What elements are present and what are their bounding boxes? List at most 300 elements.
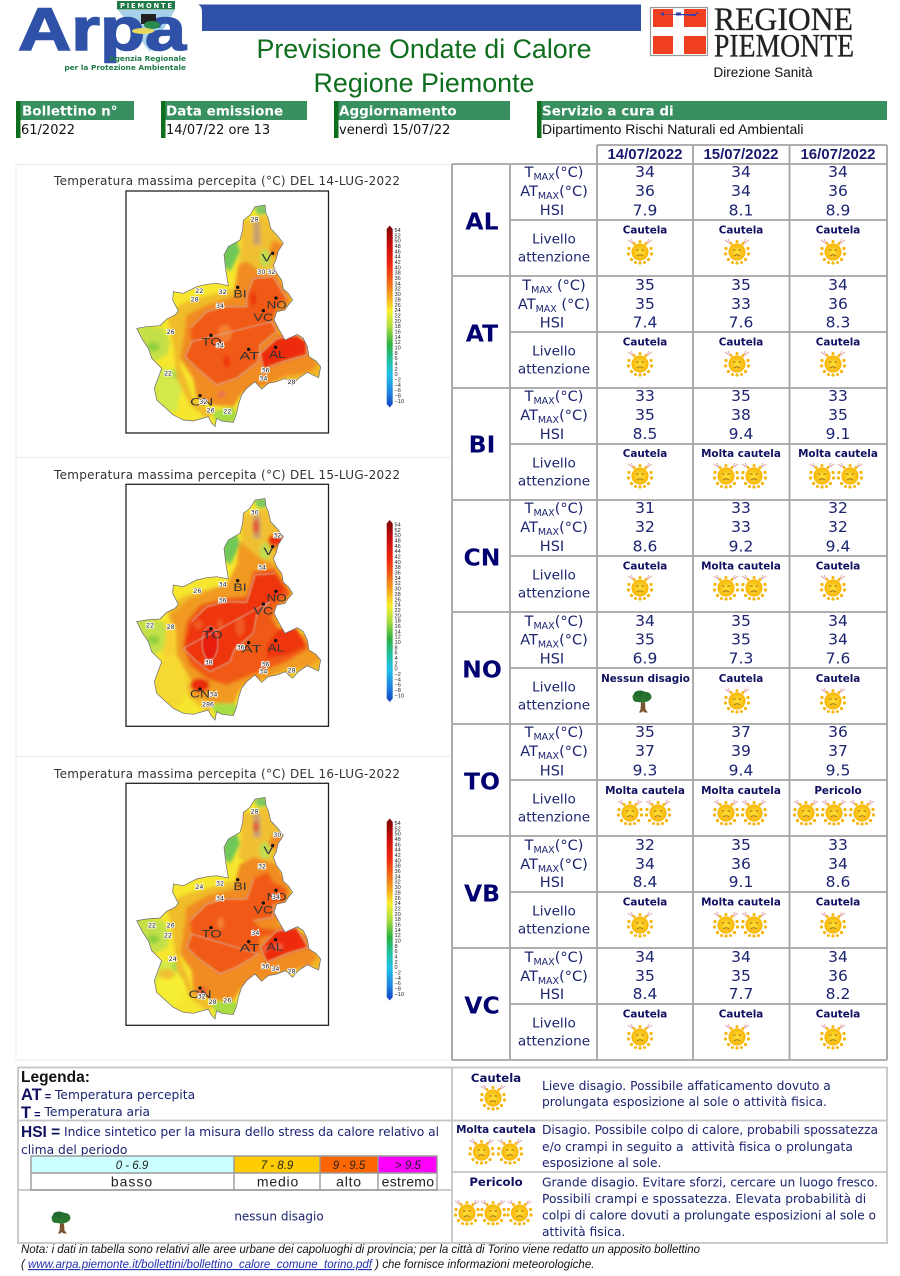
map 14 luglio: 22 <box>164 371 172 378</box>
row CN: MAX <box>538 527 560 538</box>
row CN: Cautela <box>623 560 667 572</box>
row VC: 34 <box>635 948 655 966</box>
row AT: T <box>522 278 531 294</box>
row VB: attenzione <box>518 922 590 938</box>
legend: HSI scale table: 7 - 8.9 <box>261 1160 294 1172</box>
map 15 luglio: 34 <box>259 668 267 675</box>
colour scale: −8 <box>394 394 401 400</box>
map 15 luglio <box>53 468 404 726</box>
row BI: 38 <box>731 406 751 424</box>
logo: Regione Piemonte: PIEMONTE <box>714 28 854 64</box>
row VC: HSI <box>540 987 564 1003</box>
row VC: 34 <box>731 948 751 966</box>
table header dates: 14/07/2022 <box>607 146 683 163</box>
info box: Bollettino: 61/2022 <box>21 123 75 138</box>
map 16 luglio: 22 <box>164 933 172 940</box>
row CN: attenzione <box>518 586 590 602</box>
colour scale: 32 <box>394 880 401 886</box>
row NO: 34 <box>635 612 655 630</box>
info box: Data emissione: 14/07/22 ore 13 <box>166 123 270 138</box>
colour scale: 34 <box>394 874 401 880</box>
colour scale: 2 <box>394 367 398 373</box>
row NO: 7.3 <box>729 650 753 668</box>
row AT: Livello <box>532 344 576 360</box>
map 16 luglio: 28 <box>288 969 296 976</box>
row BI: Cautela <box>623 448 667 460</box>
footnote: Nota: i dati in tabella sono relativi alle aree urbane dei capoluoghi di provincia; per la città di Torino viene redatto un apposito bollettino <box>21 1244 701 1256</box>
row AT: Cautela <box>719 336 763 348</box>
row AL: 36 <box>635 182 655 200</box>
row VC <box>464 948 860 1050</box>
map 16 luglio: 24 <box>169 956 177 963</box>
colour scale: 50 <box>394 533 401 539</box>
map 16 luglio: 34 <box>216 895 224 902</box>
map 16 luglio: 34 <box>272 894 280 901</box>
map 15 luglio: 30 <box>251 510 259 517</box>
legend: HSI definition: Indice sintetico per la misura dello stress da calore relativo al <box>64 1125 439 1139</box>
map 14 luglio: Temperatura massima percepita (°C) DEL 14-LUG-2022 <box>53 174 400 188</box>
row VB: Cautela <box>816 896 860 908</box>
colour scale: 6 <box>394 356 398 362</box>
map 16 luglio: 32 <box>258 863 266 870</box>
row AT: 7.4 <box>633 314 657 332</box>
legend: Cautela <box>471 1071 831 1111</box>
colour scale: 38 <box>394 565 401 571</box>
legend: Pericolo: Possibili crampi e spossatezza. Elevata probabilità di <box>542 1192 866 1206</box>
colour scale: 42 <box>394 260 401 266</box>
colour scale: 48 <box>394 244 401 250</box>
row VB: HSI <box>540 875 564 891</box>
row CN: 8.6 <box>633 538 657 556</box>
colour scale: 28 <box>394 592 401 598</box>
colour scale: 44 <box>394 848 401 854</box>
colour scale: 54 <box>394 522 401 528</box>
legend: Pericolo <box>454 1175 878 1239</box>
row BI: (°C) <box>559 408 588 424</box>
info box: Aggiornamento: Aggiornamento <box>339 104 457 120</box>
colour scale: 48 <box>394 539 401 545</box>
row CN: 32 <box>828 499 848 517</box>
row VC: attenzione <box>518 1034 590 1050</box>
colour scale: 8 <box>394 645 398 651</box>
colour scale: 40 <box>394 265 401 271</box>
map 14 luglio: 26 <box>167 329 175 336</box>
colour scale: 22 <box>394 313 401 319</box>
map 16 luglio: 28 <box>251 809 259 816</box>
colour scale: −6 <box>394 981 401 987</box>
row BI: Livello <box>532 456 576 472</box>
row AT: 34 <box>828 276 848 294</box>
row AL: HSI <box>540 203 564 219</box>
row VB: MAX <box>533 845 555 856</box>
row CN: (°C) <box>555 501 583 517</box>
legend: AT and T definitions <box>21 1069 195 1122</box>
logo: Regione Piemonte: REGIONE <box>714 2 853 38</box>
map 14 luglio: 22 <box>223 408 231 415</box>
row TO: 36 <box>828 723 848 741</box>
row AL: AL <box>465 208 499 236</box>
row AT: 7.6 <box>729 314 753 332</box>
colour scale: 6 <box>394 949 398 955</box>
row AT: MAX <box>536 304 557 315</box>
map 16 luglio: 36 <box>261 963 269 970</box>
map 16 luglio: 32 <box>198 993 206 1000</box>
colour scale: −4 <box>394 383 401 389</box>
map 15 luglio: 26 <box>193 588 201 595</box>
row NO: Cautela <box>816 673 860 685</box>
table header dates <box>607 146 876 163</box>
map 15 luglio: 286 <box>202 702 214 709</box>
colour scale: 36 <box>394 869 401 875</box>
row BI <box>469 387 878 490</box>
info box: Bollettino <box>16 101 134 138</box>
row CN: MAX <box>533 508 555 519</box>
row VC: Livello <box>532 1016 576 1032</box>
map 14 luglio: V <box>262 253 273 265</box>
colour scale: −10 <box>394 992 404 998</box>
info box: Aggiornamento <box>334 101 510 138</box>
legend: AT and T definitions: T = <box>21 1104 41 1122</box>
row AL: 7.9 <box>633 202 657 220</box>
map 16 luglio: V <box>263 845 275 857</box>
map 15 luglio: 28 <box>167 624 175 631</box>
legend: Pericolo: Pericolo <box>469 1175 523 1189</box>
map 14 luglio: 26 <box>207 407 215 414</box>
logo: Arpa Piemonte: per la Protezione Ambientale <box>64 63 186 72</box>
row BI: (°C) <box>555 389 583 405</box>
map 15 luglio: 28 <box>288 667 296 674</box>
map 14 luglio: 22 <box>195 288 203 295</box>
colour scale: −8 <box>394 987 401 993</box>
legend: HSI definition <box>21 1124 439 1157</box>
row TO: MAX <box>533 732 555 743</box>
row BI: 33 <box>635 387 655 405</box>
row BI: 35 <box>828 406 848 424</box>
row AL: Cautela <box>719 224 763 236</box>
row BI: MAX <box>533 396 555 407</box>
map 14 luglio: 28 <box>288 379 296 386</box>
panel: maps frame <box>16 164 452 1060</box>
colour scale: 4 <box>394 656 398 662</box>
map 16 luglio: 32 <box>216 881 224 888</box>
info box: Servizio <box>537 101 887 138</box>
colour scale: −10 <box>394 399 404 405</box>
map 16 luglio: 28 <box>209 999 217 1006</box>
legend: HSI scale table: estremo <box>382 1174 434 1190</box>
row CN <box>464 499 860 602</box>
colour scale: 40 <box>394 560 401 566</box>
colour scale: 30 <box>394 292 401 298</box>
row VB <box>464 836 860 938</box>
row AT: 35 <box>635 276 655 294</box>
colour scale: 46 <box>394 249 401 255</box>
colour scale: 54 <box>394 821 401 827</box>
row VB: 35 <box>731 836 751 854</box>
colour scale: −4 <box>394 677 401 683</box>
legend: AT and T definitions: Temperatura percepita <box>54 1088 195 1102</box>
row VB: 36 <box>731 855 751 873</box>
row VC: 8.4 <box>633 985 657 1003</box>
row VC: 36 <box>828 967 848 985</box>
row NO: (°C) <box>559 632 588 648</box>
row BI: 9.1 <box>826 425 850 443</box>
colour scale: 30 <box>394 587 401 593</box>
row AL: attenzione <box>518 250 590 266</box>
colour scale: 12 <box>394 635 401 641</box>
row VC: AT <box>520 969 538 985</box>
table header dates: 15/07/2022 <box>703 146 779 163</box>
row BI: T <box>525 389 533 405</box>
row AT: 36 <box>828 295 848 313</box>
row BI: attenzione <box>518 474 590 490</box>
row NO: 35 <box>731 630 751 648</box>
colour scale: 34 <box>394 576 401 582</box>
colour scale: −6 <box>394 683 401 689</box>
map 14 luglio: AT <box>239 350 260 362</box>
map 15 luglio: 36 <box>237 645 245 652</box>
colour scale: 14 <box>394 928 401 934</box>
map 16 luglio: VC <box>253 904 274 916</box>
colour scale: 52 <box>394 826 401 832</box>
row CN: 9.4 <box>826 538 850 556</box>
row CN: 9.2 <box>729 538 753 556</box>
colour scale <box>387 520 404 702</box>
colour scale: 44 <box>394 255 401 261</box>
map 15 luglio: TO <box>203 630 223 642</box>
row TO: AT <box>520 744 538 760</box>
map 14 luglio: 32 <box>219 289 227 296</box>
map 15 luglio: VC <box>253 605 274 617</box>
map 15 luglio: AL <box>268 642 284 654</box>
map 16 luglio: 34 <box>251 930 259 937</box>
row AL <box>465 163 860 266</box>
row VB: 8.6 <box>826 873 850 891</box>
row VC: MAX <box>538 976 560 987</box>
map 14 luglio: 34 <box>216 342 224 349</box>
row VB: 34 <box>828 855 848 873</box>
info box: Data emissione <box>161 101 307 138</box>
row TO <box>464 723 875 826</box>
row AL: MAX <box>533 172 555 183</box>
map 16 luglio: AL <box>267 942 283 954</box>
row BI: Molta cautela <box>798 448 878 460</box>
colour scale: −4 <box>394 976 401 982</box>
colour scale: 18 <box>394 324 401 330</box>
map 15 luglio: AT <box>242 644 262 656</box>
legend: Molta cautela <box>456 1123 878 1170</box>
map 16 luglio: BI <box>233 881 247 893</box>
row AL: Livello <box>532 232 576 248</box>
colour scale: 4 <box>394 954 398 960</box>
legend: AT and T definitions: AT = <box>21 1086 51 1104</box>
row VC: Cautela <box>623 1008 667 1020</box>
row VB: (°C) <box>559 857 588 873</box>
map 15 luglio: 34 <box>258 565 266 572</box>
colour scale: 6 <box>394 651 398 657</box>
colour scale: 20 <box>394 613 401 619</box>
colour scale: 42 <box>394 555 401 561</box>
row VC: T <box>525 950 533 966</box>
row NO: 6.9 <box>633 650 657 668</box>
row VB: Cautela <box>623 896 667 908</box>
row TO: 35 <box>635 723 655 741</box>
row AL: 34 <box>635 163 655 181</box>
row CN: Cautela <box>816 560 860 572</box>
row NO: Nessun disagio <box>601 673 690 685</box>
map 16 luglio: 24 <box>195 884 203 891</box>
row CN: 32 <box>635 518 655 536</box>
colour scale: 50 <box>394 239 401 245</box>
map 16 luglio: NO <box>267 892 287 904</box>
map 15 luglio: V <box>263 546 275 558</box>
colour scale: 32 <box>394 287 401 293</box>
colour scale: −8 <box>394 688 401 694</box>
map 15 luglio: NO <box>267 593 287 605</box>
row VC: VC <box>464 992 500 1020</box>
row AL: Cautela <box>816 224 860 236</box>
row TO: 9.3 <box>633 762 657 780</box>
colour scale: −2 <box>394 378 401 384</box>
row TO: MAX <box>538 751 560 762</box>
row VB: VB <box>464 880 500 908</box>
map 14 luglio: CN <box>190 397 213 409</box>
colour scale: 30 <box>394 885 401 891</box>
footnote <box>21 1244 701 1271</box>
map 14 luglio: 32 <box>199 399 207 406</box>
row CN: 33 <box>731 518 751 536</box>
map 16 luglio: AT <box>239 943 260 955</box>
row BI: 35 <box>635 406 655 424</box>
row NO: Cautela <box>719 673 763 685</box>
row AL: 8.9 <box>826 202 850 220</box>
info box: Servizio: Dipartimento Rischi Naturali ed Ambientali <box>542 121 803 137</box>
colour scale: −2 <box>394 672 401 678</box>
map 16 luglio: 26 <box>167 923 175 930</box>
row TO: attenzione <box>518 810 590 826</box>
row CN: 33 <box>731 499 751 517</box>
colour scale: 52 <box>394 528 401 534</box>
row TO: Livello <box>532 792 576 808</box>
colour scale: 52 <box>394 233 401 239</box>
legend: Pericolo: colpi di calore dovuti a prolungate esposizioni al sole o <box>542 1208 876 1222</box>
row TO: 37 <box>731 723 751 741</box>
colour scale: 34 <box>394 281 401 287</box>
row NO: T <box>525 614 533 630</box>
legend: HSI definition: HSI = <box>21 1124 60 1141</box>
colour scale: 0 <box>394 667 398 673</box>
colour scale: 46 <box>394 544 401 550</box>
row VC: 7.7 <box>729 985 753 1003</box>
row CN: HSI <box>540 539 564 555</box>
map 14 luglio: VC <box>253 312 274 324</box>
legend: nessun disagio: nessun disagio <box>234 1210 324 1224</box>
row TO: T <box>525 725 533 741</box>
colour scale: 36 <box>394 276 401 282</box>
row TO: (°C) <box>555 725 583 741</box>
map 15 luglio: 36 <box>218 597 226 604</box>
colour scale: 20 <box>394 319 401 325</box>
row VB: MAX <box>538 864 560 875</box>
colour scale: −2 <box>394 971 401 977</box>
row AT: (°C) <box>557 297 590 313</box>
map 15 luglio: 34 <box>209 691 217 698</box>
row AL: 36 <box>828 182 848 200</box>
map 15 luglio: Temperatura massima percepita (°C) DEL 15-LUG-2022 <box>53 468 400 482</box>
row AT: AT <box>466 320 498 348</box>
colour scale: 22 <box>394 906 401 912</box>
colour scale: 26 <box>394 303 401 309</box>
colour scale: 28 <box>394 297 401 303</box>
row NO: MAX <box>533 621 555 632</box>
legend: HSI scale table: medio <box>257 1174 299 1190</box>
row AL: AT <box>520 184 538 200</box>
row VC: 35 <box>731 967 751 985</box>
colour scale: −10 <box>394 693 404 699</box>
row NO: Livello <box>532 680 576 696</box>
map 14 luglio <box>53 174 404 433</box>
colour scale: 38 <box>394 271 401 277</box>
legend: Molta cautela: Molta cautela <box>456 1124 536 1136</box>
legend: Pericolo: Grande disagio. Evitare sforzi, cercare un luogo fresco. <box>542 1176 878 1190</box>
row BI: 33 <box>828 387 848 405</box>
colour scale: 26 <box>394 896 401 902</box>
map 16 luglio: CN <box>188 989 212 1001</box>
blue header bar <box>198 4 641 31</box>
colour scale: 8 <box>394 351 398 357</box>
colour scale: −6 <box>394 388 401 394</box>
legend: HSI scale table: 9 - 9.5 <box>333 1160 366 1172</box>
info box: Servizio: Servizio a cura di <box>542 104 674 120</box>
row AT: MAX <box>531 285 553 296</box>
row TO: Pericolo <box>814 785 862 797</box>
row AT: 35 <box>731 276 751 294</box>
colour scale: 14 <box>394 629 401 635</box>
row NO: (°C) <box>555 614 583 630</box>
row NO: NO <box>462 656 502 684</box>
row BI: 35 <box>731 387 751 405</box>
colour scale: 10 <box>394 938 401 944</box>
legend: Molta cautela: Disagio. Possibile colpo di calore, probabili spossatezza <box>542 1123 878 1137</box>
row VC: (°C) <box>559 969 588 985</box>
row AL: (°C) <box>559 184 588 200</box>
row TO: 9.5 <box>826 762 850 780</box>
colour scale: 40 <box>394 858 401 864</box>
legend: HSI scale table: 0 - 6.9 <box>116 1160 149 1172</box>
row BI: Molta cautela <box>701 448 781 460</box>
colour scale: 12 <box>394 933 401 939</box>
row BI: BI <box>469 430 495 458</box>
row NO: 34 <box>828 612 848 630</box>
row AT: 33 <box>731 295 751 313</box>
table header dates: 16/07/2022 <box>800 146 876 163</box>
map 15 luglio: BI <box>233 582 247 594</box>
row NO <box>462 612 860 714</box>
info box: Bollettino: Bollettino n° <box>22 104 117 120</box>
legend: Pericolo: attività fisica. <box>542 1225 625 1239</box>
row AT: HSI <box>540 316 564 332</box>
row TO: Molta cautela <box>701 785 781 797</box>
row VB: Livello <box>532 904 576 920</box>
colour scale: 10 <box>394 345 401 351</box>
row BI: MAX <box>538 415 560 426</box>
row NO: 35 <box>635 630 655 648</box>
legend: AT and T definitions: Temperatura aria <box>44 1105 150 1119</box>
row VC: 34 <box>828 948 848 966</box>
row BI: AT <box>520 408 538 424</box>
row AL: 34 <box>828 163 848 181</box>
row AT: Cautela <box>816 336 860 348</box>
map 14 luglio: 34 <box>259 376 267 383</box>
